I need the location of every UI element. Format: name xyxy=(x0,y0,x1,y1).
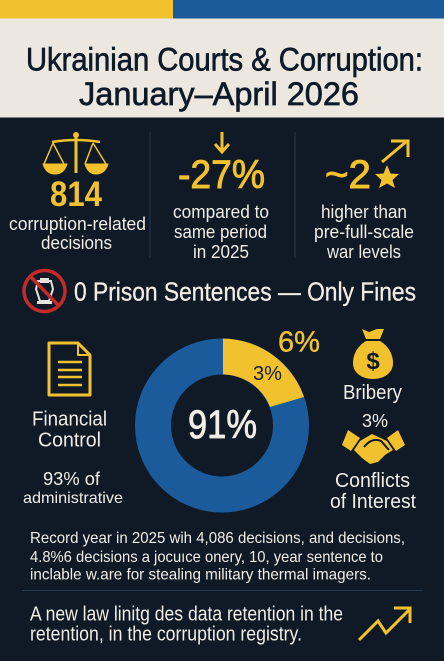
stat: -27%: compared to xyxy=(173,202,269,222)
panel: bribery: 3% xyxy=(362,411,388,431)
icon: prohibited handcuffs xyxy=(24,270,65,312)
stat: -27%: same period xyxy=(174,222,267,242)
panel: conflicts of interest xyxy=(330,430,416,513)
stat: 814 decisions xyxy=(9,132,146,253)
stat: ~2 times: pre-full-scale xyxy=(314,222,414,242)
stat: ~2 times: ~2 xyxy=(325,153,371,197)
donut chart: 3% xyxy=(253,363,282,385)
stat: 814 decisions: 814 xyxy=(50,175,102,214)
panel: financial control: 93% of xyxy=(43,469,101,489)
stat: ~2 times: war levels xyxy=(326,242,401,262)
icon: document xyxy=(49,343,90,395)
panel: conflicts of interest: of Interest xyxy=(330,491,416,513)
panel: conflicts of interest: Conflicts xyxy=(335,470,410,492)
text block: record year: Record year in 2025 wih 4,086 decisions, and decisions, xyxy=(30,530,405,547)
stat: 814 decisions: corruption-related xyxy=(9,214,146,234)
title panel: January–April 2026 xyxy=(79,76,359,112)
text block: record year: inclable w.are for stealing military thermal imagers. xyxy=(30,566,371,584)
text block: new law: A new law linitg des data retention in the xyxy=(30,604,343,626)
stat: ~2 times: higher than xyxy=(321,202,407,222)
icon: money bag: $ xyxy=(366,348,380,375)
stat: -27% xyxy=(173,132,269,262)
donut chart: 91% xyxy=(188,403,257,447)
icon: up arrow xyxy=(382,141,408,162)
stat: -27%: in 2025 xyxy=(193,242,249,262)
icon: star xyxy=(375,165,399,188)
header colour band xyxy=(0,0,444,18)
stat: -27%: -27% xyxy=(178,153,265,197)
panel: financial control xyxy=(23,343,123,507)
panel: financial control: administrative xyxy=(23,490,123,507)
stat: ~2 times xyxy=(314,141,414,262)
text block: new law: retention, in the corruption registry. xyxy=(30,624,302,646)
panel: bribery xyxy=(343,329,402,431)
icon: scales of justice xyxy=(43,132,108,174)
icon: handshake xyxy=(342,430,405,464)
icon: down arrow xyxy=(215,132,229,152)
text block: record year: 4.8%6 decisions a jocuıce onery, 10, year sentence to xyxy=(30,549,383,566)
title panel xyxy=(0,18,444,118)
icon: trend arrow xyxy=(359,608,410,640)
panel: bribery: Bribery xyxy=(343,382,402,404)
donut segment: yellow 6% xyxy=(223,338,304,407)
stat: 814 decisions: decisions xyxy=(41,233,112,253)
text block: record year xyxy=(30,530,405,584)
callout: zero prison sentences xyxy=(24,270,416,312)
label: 6%: 6% xyxy=(278,326,320,358)
donut chart xyxy=(153,338,304,494)
panel: financial control: Control xyxy=(38,430,101,452)
panel: financial control: Financial xyxy=(32,408,107,430)
text block: new law xyxy=(30,604,343,646)
